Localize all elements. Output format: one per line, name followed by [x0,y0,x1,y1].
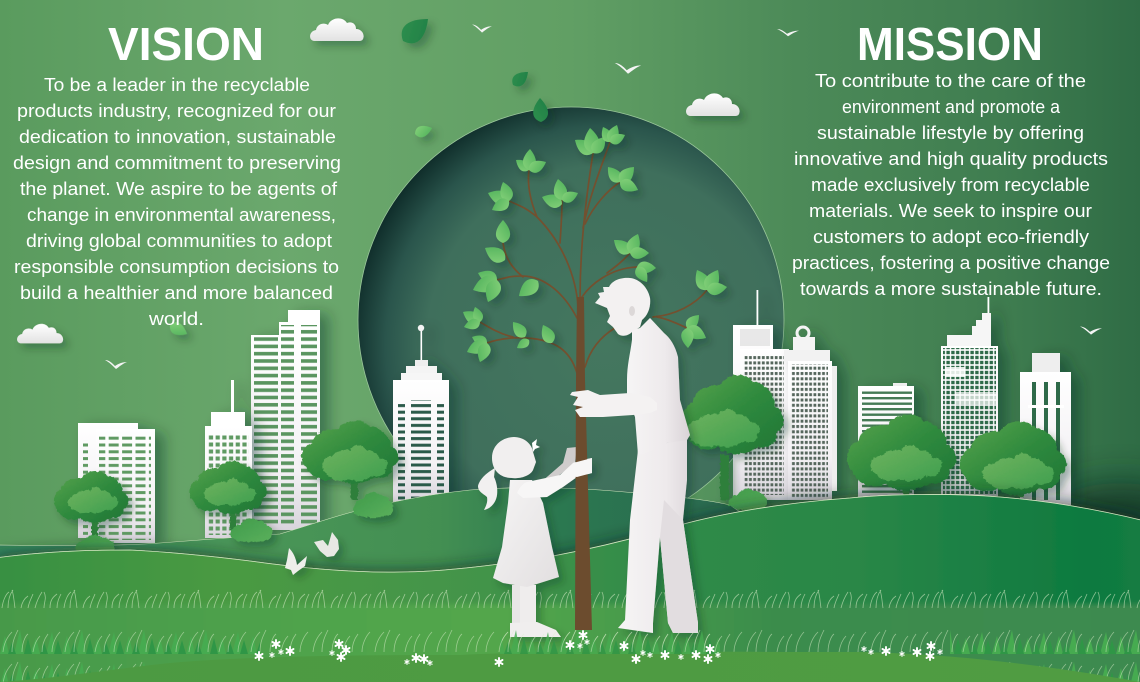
hair bow [532,439,540,452]
man [595,278,698,633]
tree 3 [302,421,399,518]
rear leg shading [660,500,698,633]
mission heading: MISSION [857,18,1043,70]
building 2 [205,380,252,538]
ponytail [478,468,497,510]
building 7 [858,383,914,497]
mission text [792,71,1110,299]
mission text: customers to adopt eco-friendly [813,227,1089,247]
floating leaves [167,11,548,339]
building 6 [784,327,837,500]
vision text: the planet. We aspire to be agents of [20,179,338,199]
shirt [627,318,690,455]
mid grass meadow [0,604,1140,682]
grass band [0,584,1140,682]
mission text: sustainable lifestyle by offering [817,123,1084,143]
ground [0,652,1140,682]
left skyline [78,310,449,543]
front grass blades right [950,622,1140,682]
vision text: build a healthier and more balanced [20,283,333,303]
butterfly left [285,548,307,575]
trousers [618,438,698,633]
building 3 tall [251,310,320,530]
building 4 [393,325,449,502]
vision text: design and commitment to preserving [13,153,341,173]
legs [510,585,561,637]
child hand on trunk [570,458,592,477]
tree 2 [189,461,272,542]
ear [629,306,635,316]
vision text: To be a leader in the recyclable [44,75,310,95]
front arm [517,458,592,498]
leaves [460,123,728,364]
mission text: To contribute to the care of the [815,71,1086,91]
mission text: materials. We seek to inspire our [809,201,1092,221]
building 9 [1020,353,1071,505]
child [478,437,592,637]
clouds [17,18,740,343]
right edge shadow [1050,483,1140,547]
back arm [540,447,577,483]
vision text: dedication to innovation, sustainable [19,127,336,147]
mission text: practices, fostering a positive change [792,253,1110,273]
building 8 [941,297,998,496]
tree 4 [682,375,784,510]
back hill [0,488,780,620]
mission text: made exclusively from recyclable [811,175,1090,195]
vision text: responsible consumption decisions to [14,257,339,277]
building 1 [78,423,155,543]
right trees [682,375,1066,510]
birds [105,24,1102,369]
front wave hill [0,494,1140,682]
back grass blades [0,584,1140,610]
tree trunk [575,297,592,630]
flowers [256,631,942,666]
tree trunk and branches [460,123,728,373]
vision heading: VISION [108,18,264,70]
head [595,278,650,336]
tree 1 [53,471,129,554]
branches [480,142,707,373]
butterfly right [314,532,339,557]
tree 5 [847,414,956,497]
vision text: change in environmental awareness, [27,205,336,225]
butterflies [285,532,339,575]
mission text: innovative and high quality products [794,149,1108,169]
vision text: products industry, recognized for our [17,101,336,121]
tree 6 [960,421,1066,497]
vision text: world. [148,309,204,329]
vision text [13,75,341,329]
man arm and hand [570,390,657,417]
front grass lines middle [260,622,950,654]
front grass blades left [0,622,260,682]
right skyline [733,290,1071,505]
mission text: environment and promote a [842,97,1061,117]
front grass over feet [500,622,720,654]
head [492,437,536,478]
building 5 [733,290,789,500]
circular cut-out [358,107,784,533]
vision text: driving global communities to adopt [26,231,332,251]
dress [493,480,559,587]
left trees [53,421,399,554]
mission text: towards a more sustainable future. [800,279,1102,299]
